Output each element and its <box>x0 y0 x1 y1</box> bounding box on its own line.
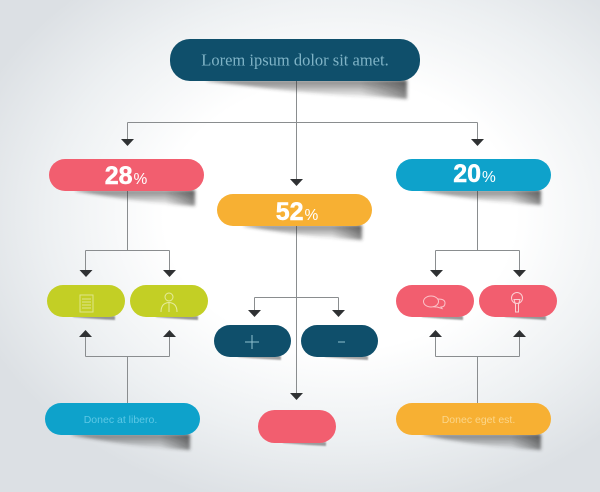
icon: plus <box>245 335 259 349</box>
panel: 52%: 52% <box>276 198 319 226</box>
icon: person <box>161 293 177 312</box>
panel: minus node <box>301 325 378 360</box>
panel: document node <box>47 285 125 320</box>
panel: Donec eget est <box>396 403 551 450</box>
panel: plus node <box>214 325 291 360</box>
icon: minus <box>338 341 345 343</box>
shadow: top title <box>207 80 407 99</box>
panel: person node <box>130 285 208 320</box>
icon: light bulb <box>512 292 522 312</box>
panel: speech node <box>396 285 474 320</box>
panel: Donec at libero <box>45 403 200 450</box>
panel: 28%: 28% <box>105 162 148 190</box>
panel: 28% <box>49 159 204 206</box>
arrowheads <box>79 139 526 400</box>
icon: document <box>80 295 93 312</box>
panel: bulb node <box>479 285 557 320</box>
panel: Donec at libero: Donec at libero. <box>84 414 157 426</box>
panel: top title <box>170 39 420 99</box>
panel: Donec eget est: Donec eget est. <box>442 414 515 426</box>
panel: 52% <box>217 194 372 240</box>
panel: 20% <box>396 159 551 205</box>
panel: top title: Lorem ipsum dolor sit amet. <box>201 50 389 70</box>
panel: blank red node <box>258 410 336 446</box>
icon: speech bubbles <box>424 296 445 308</box>
panel: 20%: 20% <box>453 160 496 188</box>
connector lines <box>86 81 520 403</box>
